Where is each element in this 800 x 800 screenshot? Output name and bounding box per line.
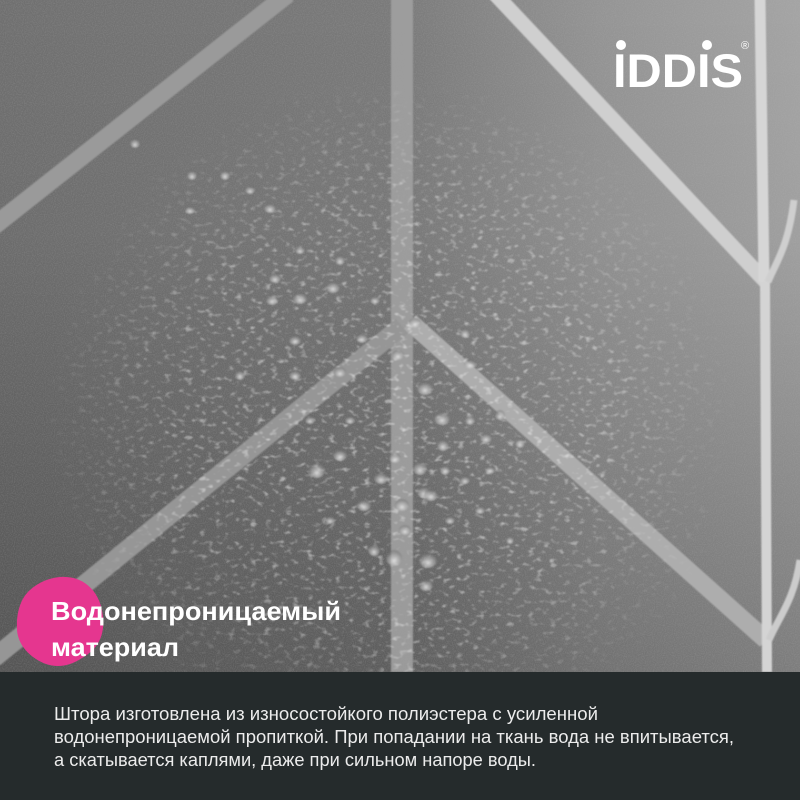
description band [0, 672, 800, 800]
description text: Штора изготовлена из износостойкого полиэстера с усиленной [54, 704, 598, 724]
pink accent blob [17, 577, 103, 666]
heading: материал [51, 632, 179, 662]
logo: IDDIS: ® [741, 40, 749, 52]
description text [54, 704, 734, 770]
heading [51, 596, 341, 662]
logo: IDDIS: IDDIS [613, 44, 743, 97]
water droplets on fabric [66, 100, 698, 672]
heading: Водонепроницаемый [51, 596, 341, 626]
description text: а скатывается каплями, даже при сильном напоре воды. [54, 750, 536, 770]
description text: водонепроницаемой пропиткой. При попадании на ткань вода не впитывается, [54, 727, 734, 747]
